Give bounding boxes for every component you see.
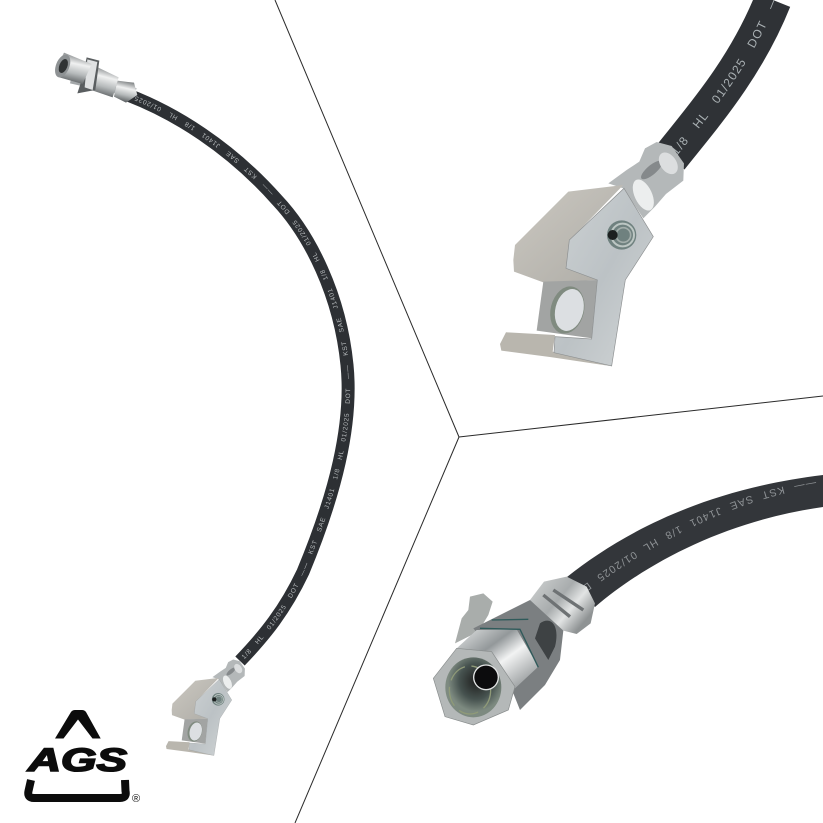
fitting — [433, 577, 595, 725]
panel: bracket close-up — [500, 0, 790, 366]
hose close-up — [670, 0, 773, 158]
panel: full hose — [55, 52, 355, 756]
hose close-up — [567, 475, 823, 607]
logo: AGS — [27, 710, 140, 805]
hose print: 1/8 HL 01/2025 DOT —— KST SAE J1401 1/8 HL 01/2025 DOT —— KST SAE J1401 1/8 HL 01/2025 DOT —— KST SAE J1401 1/8 HL 01/2025 DOT — [134, 96, 350, 659]
logo top chevron — [55, 710, 101, 738]
hose body — [128, 95, 348, 661]
top fitting — [52, 52, 137, 103]
divider lines — [275, 0, 823, 823]
registered mark: ® — [132, 793, 140, 805]
bracket and crimped ferrule — [500, 142, 684, 366]
logo wordmark: AGS — [27, 742, 128, 778]
logo base — [28, 780, 126, 798]
bottom bracket — [166, 659, 245, 756]
hose close-up print: —— KST SAE J1401 1/8 HL 01/2025 DOT — [584, 482, 816, 590]
